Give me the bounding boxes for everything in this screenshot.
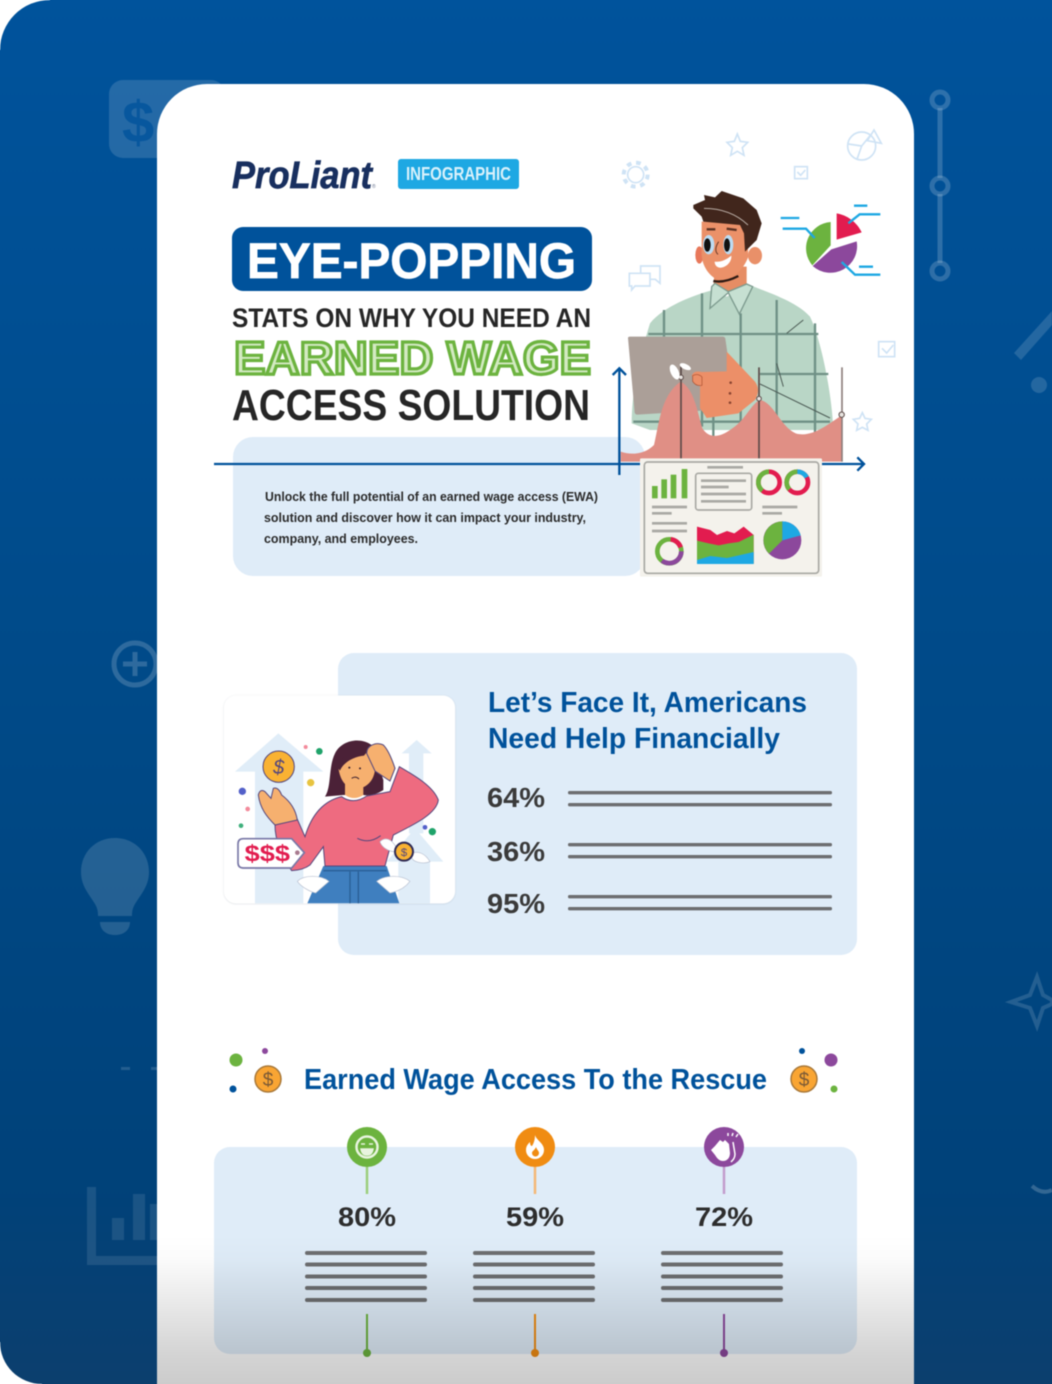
pie chart <box>781 206 880 275</box>
heading line 1: Let’s Face It, Americans <box>488 687 807 719</box>
collar <box>710 283 753 314</box>
stat column: 80%: 80% <box>338 1202 396 1232</box>
intro line 3: company, and employees. <box>264 532 418 546</box>
mini bars <box>652 469 687 498</box>
title block <box>232 227 592 430</box>
coin: $ <box>272 757 285 779</box>
chart mountain <box>621 382 842 462</box>
illustration: worried woman <box>224 696 455 907</box>
decorative outline icons <box>624 130 895 430</box>
flying coin <box>380 839 430 863</box>
icon: right coin and dots <box>791 1048 838 1092</box>
icon: sparkle star <box>1011 977 1052 1026</box>
headline line 4: ACCESS SOLUTION <box>232 381 590 430</box>
mini pie <box>763 521 801 559</box>
badge: infographic <box>398 159 519 189</box>
icon: dollar square <box>109 80 225 158</box>
face <box>338 752 375 789</box>
stat rows <box>487 782 832 919</box>
price tag <box>238 839 304 868</box>
intro line 2: solution and discover how it can impact your industry, <box>264 511 586 525</box>
heading: americans need help <box>488 687 807 755</box>
axes <box>214 368 864 475</box>
hand <box>692 352 758 418</box>
tablet <box>628 337 735 415</box>
stat column: 72%: 72% <box>695 1202 753 1232</box>
icon: pie <box>848 130 881 160</box>
stat: 95%: 95% <box>487 888 545 919</box>
dashboard <box>640 458 822 577</box>
bottom fade <box>157 1235 914 1384</box>
left hand <box>258 788 297 825</box>
logo: ProLiant: ProLiant <box>232 155 373 197</box>
shirt plaid <box>633 293 830 437</box>
sweater <box>275 767 438 871</box>
pockets <box>297 876 410 893</box>
face <box>702 222 748 280</box>
coin <box>263 751 294 782</box>
stat column: 80% <box>305 1127 427 1357</box>
mini area chart <box>697 527 754 563</box>
icon: curve <box>1032 1186 1052 1192</box>
illustration: man with chart <box>214 130 895 577</box>
intro text <box>264 490 598 546</box>
stat column: 59%: 59% <box>506 1202 564 1232</box>
icon: bar chart <box>87 1187 160 1265</box>
icon: star right <box>853 413 871 430</box>
raised hand <box>367 744 395 781</box>
icon: timeline rings <box>932 92 948 279</box>
icon: dollar square: $ <box>122 90 154 155</box>
heading: earned wage access to the rescue: Earned Wage Access To the Rescue <box>304 1064 767 1096</box>
icon: check box <box>795 167 807 179</box>
panel: intro <box>233 437 645 576</box>
icon: light bulb <box>81 838 149 935</box>
shirt <box>632 285 833 430</box>
icon: left coin and dots: $ <box>263 1070 274 1091</box>
intro line 1: Unlock the full potential of an earned wage access (EWA) <box>265 490 598 504</box>
logo: ProLiant: ® <box>372 183 376 190</box>
price tag: $$$ <box>245 841 290 867</box>
stat column: 59% <box>473 1127 595 1357</box>
ears <box>695 246 762 264</box>
brows <box>707 229 737 230</box>
icon: chat bubbles <box>629 266 660 290</box>
stat: 64% <box>487 782 832 813</box>
stat: 36%: 36% <box>487 836 545 867</box>
mini donuts <box>657 472 808 563</box>
headline: eye-popping: EYE-POPPING <box>247 233 576 289</box>
eyes <box>703 235 733 254</box>
nose and mouth <box>716 242 719 254</box>
icon: gear <box>624 163 648 187</box>
stat: 64%: 64% <box>487 782 545 813</box>
stat column: 72% <box>661 1127 783 1357</box>
icon: left coin and dots <box>230 1048 281 1092</box>
hair back <box>325 740 383 797</box>
stat: 36% <box>487 836 832 867</box>
jeans <box>307 866 399 903</box>
icon: check box right <box>879 342 895 357</box>
icon: star <box>727 134 748 155</box>
neck <box>345 783 363 798</box>
hair <box>693 191 762 252</box>
icon: right coin and dots: $ <box>799 1070 810 1091</box>
stat: 95% <box>487 888 832 919</box>
icon: small dashes <box>121 1067 157 1070</box>
icon: flame pin <box>515 1127 555 1194</box>
icon: plus circle <box>114 643 156 685</box>
mini text box <box>696 473 752 510</box>
panel: rescue stats <box>214 1147 857 1354</box>
flying coin: $ <box>401 847 408 859</box>
icon: smiling face pin <box>347 1127 387 1194</box>
background icons <box>81 80 1052 1265</box>
panel: americans need help <box>338 653 857 955</box>
chart stems <box>681 367 842 462</box>
dots <box>239 745 436 835</box>
icon: wand <box>1014 311 1052 393</box>
background arrows <box>235 733 443 907</box>
icon: clapping hands pin <box>704 1127 744 1194</box>
white card <box>157 84 914 1384</box>
heading line 2: Need Help Financially <box>488 723 780 755</box>
badge: infographic: INFOGRAPHIC <box>406 164 511 184</box>
headline line 3: EARNED WAGE <box>234 332 591 384</box>
headline line 2: STATS ON WHY YOU NEED AN <box>232 303 591 333</box>
neck <box>713 267 747 293</box>
fingers <box>668 362 692 381</box>
